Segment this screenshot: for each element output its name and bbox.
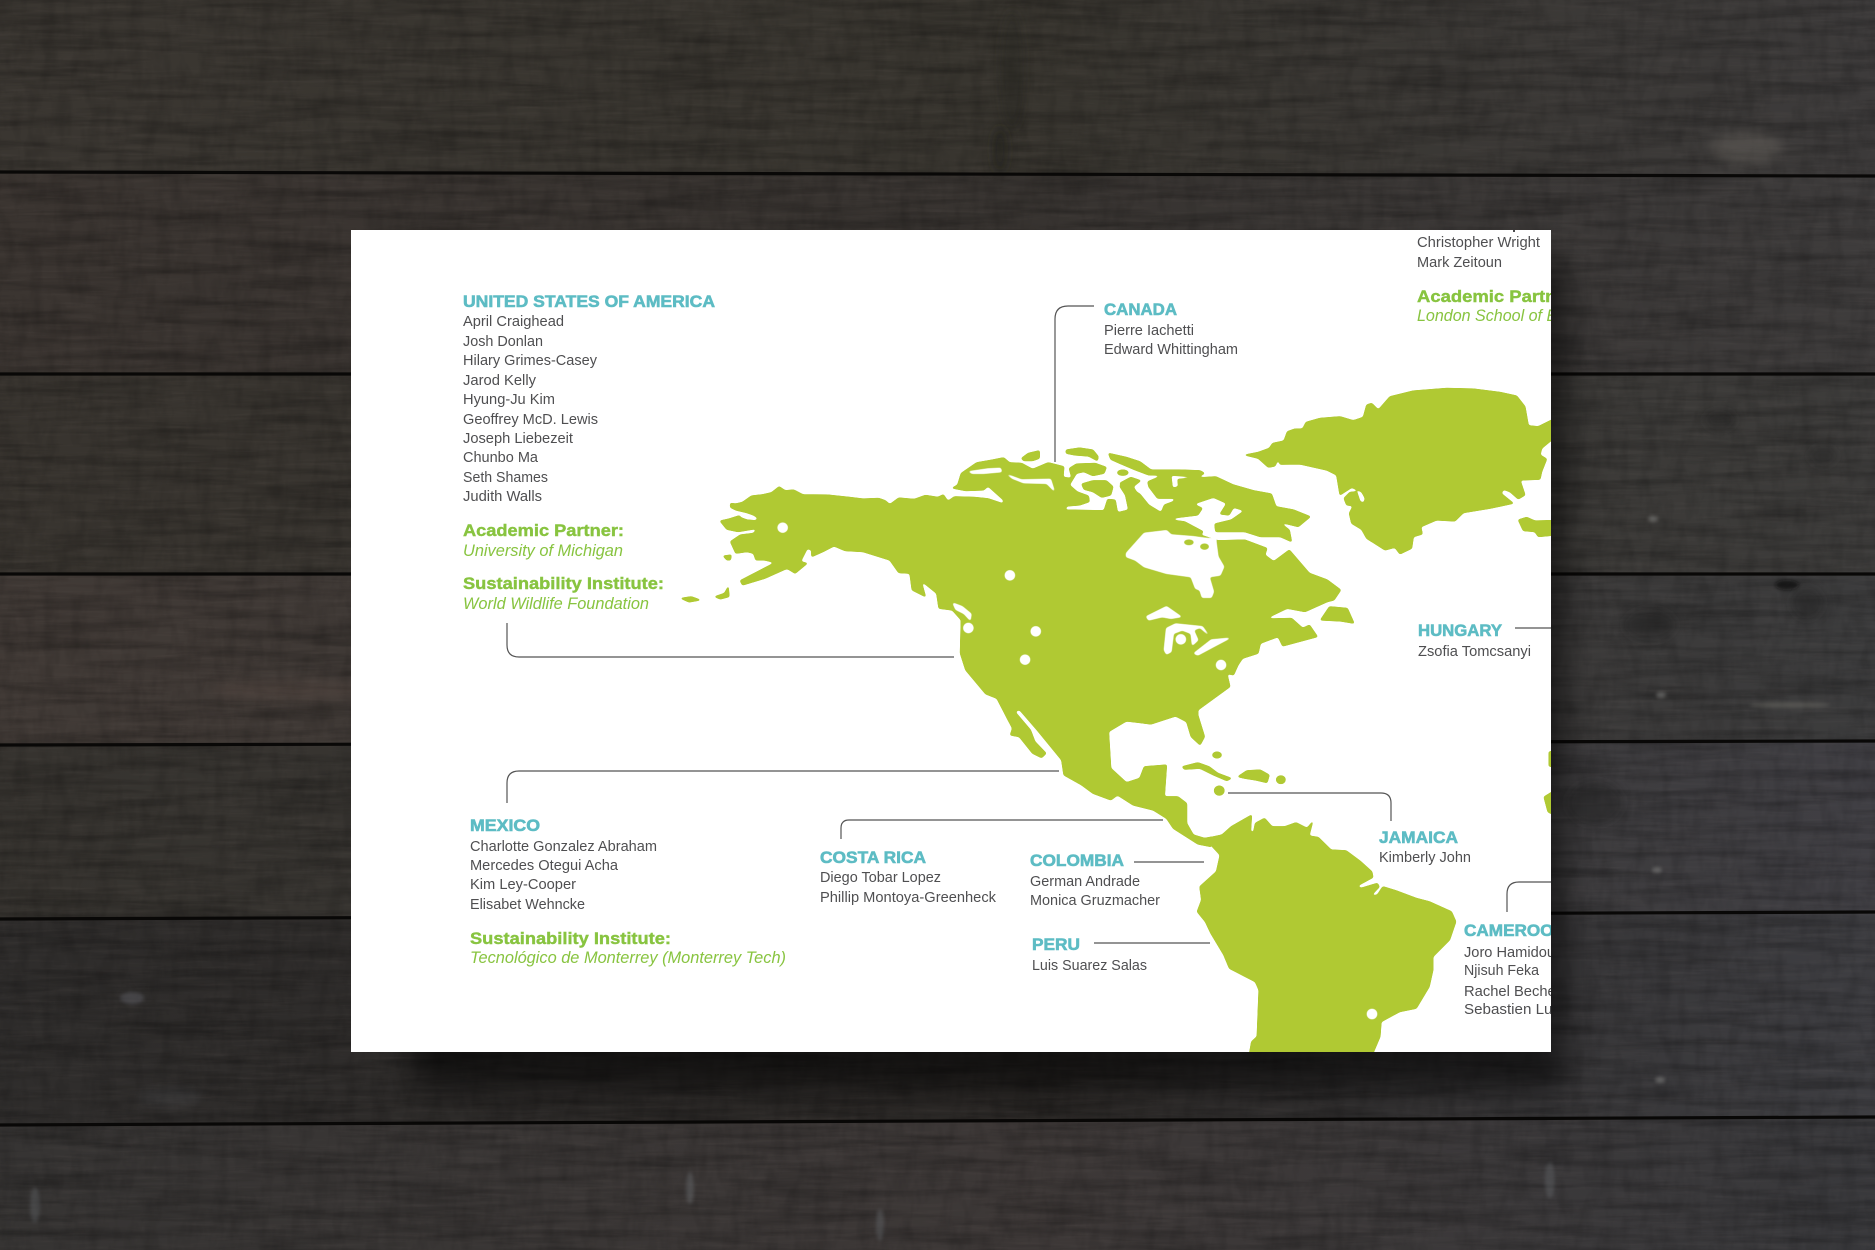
heading: United States of America: UNITED STATES OF AMERICA bbox=[463, 292, 715, 311]
names: Mexico: Kim Ley-Cooper bbox=[470, 877, 576, 893]
names: clipped block bbox=[1417, 235, 1540, 271]
names: Cameroon: Njisuh Feka bbox=[1464, 963, 1540, 979]
sustainability institute: Monterrey Tech: Tecnológico de Monterrey (Monterrey Tech) bbox=[470, 949, 786, 967]
Europe and Africa edge fragments bbox=[1544, 750, 1551, 814]
names: USA: Josh Donlan bbox=[463, 334, 543, 350]
names: clipped block: Mark Zeitoun bbox=[1417, 255, 1502, 271]
panel: Hungary bbox=[1418, 621, 1531, 660]
map of the Americas bbox=[681, 388, 1573, 1073]
heading: Mexico: MEXICO bbox=[470, 816, 540, 835]
names: Colombia: German Andrade bbox=[1030, 874, 1140, 890]
panel: Colombia bbox=[1030, 851, 1160, 909]
South America landmass bbox=[1197, 815, 1456, 1073]
academic partner: London School: London School of Economics bbox=[1417, 307, 1625, 325]
names: Cameroon: Rachel Bechem bbox=[1464, 984, 1568, 1000]
academic partner: London School: Academic Partner: bbox=[1417, 287, 1580, 306]
heading: Canada: CANADA bbox=[1104, 300, 1177, 319]
heading: Hungary: HUNGARY bbox=[1418, 621, 1503, 640]
names: clipped block: Christopher Wright bbox=[1417, 235, 1540, 251]
names: USA: Seth Shames bbox=[463, 470, 548, 486]
sustainability institute: World Wildlife Foundation: Sustainability Institute: bbox=[463, 574, 664, 593]
panel: Peru bbox=[1032, 935, 1147, 974]
names: Costa Rica bbox=[820, 870, 997, 906]
names: Peru: Luis Suarez Salas bbox=[1032, 958, 1147, 974]
sustainability institute: World Wildlife Foundation bbox=[463, 574, 664, 613]
arctic islands bbox=[681, 448, 1205, 602]
panel: Cameroon clipped at the paper edge bbox=[1464, 924, 1551, 1014]
names: USA: April Craighead bbox=[463, 314, 564, 330]
academic partner: University of Michigan bbox=[463, 521, 624, 560]
names: Mexico: Elisabet Wehncke bbox=[470, 897, 585, 913]
inland water bbox=[953, 468, 1354, 655]
Greenland and Iceland bbox=[1245, 388, 1573, 820]
panel: Jamaica bbox=[1379, 828, 1471, 866]
heading: Peru: PERU bbox=[1032, 935, 1080, 954]
names: Mexico: Charlotte Gonzalez Abraham bbox=[470, 839, 657, 855]
location dot Brazil bbox=[1367, 1009, 1377, 1019]
panel: Mexico bbox=[470, 816, 786, 967]
heading: Cameroon: CAMEROON bbox=[1464, 921, 1566, 940]
panel: Costa Rica bbox=[820, 848, 997, 906]
names: Cameroon bbox=[1464, 946, 1551, 1014]
academic partner: University of Michigan: University of Michigan bbox=[463, 542, 623, 560]
names: Canada bbox=[1104, 323, 1238, 358]
academic partner: London School bbox=[1417, 287, 1625, 325]
sustainability institute: Monterrey Tech bbox=[470, 929, 786, 967]
location dots North America bbox=[777, 522, 1226, 670]
names: Colombia: Monica Gruzmacher bbox=[1030, 893, 1160, 909]
white paper sheet bbox=[351, 230, 1551, 1052]
names: USA: Jarod Kelly bbox=[463, 373, 537, 389]
academic partner: University of Michigan: Academic Partner: bbox=[463, 521, 624, 540]
names: Mexico: Mercedes Otegui Acha bbox=[470, 858, 619, 874]
names: Hungary: Zsofia Tomcsanyi bbox=[1418, 644, 1531, 660]
names: USA: Hyung-Ju Kim bbox=[463, 392, 555, 408]
panel: Canada bbox=[1104, 300, 1238, 358]
names: Costa Rica: Diego Tobar Lopez bbox=[820, 870, 941, 886]
sustainability institute: World Wildlife Foundation: World Wildlife Foundation bbox=[463, 595, 649, 613]
names: Cameroon: Joro Hamidou bbox=[1464, 945, 1555, 961]
names: Jamaica: Kimberly John bbox=[1379, 850, 1471, 866]
names: Colombia bbox=[1030, 874, 1160, 909]
names: USA: Joseph Liebezeit bbox=[463, 431, 573, 447]
clipped descender of the previous name bbox=[1513, 230, 1515, 232]
panel: top right clipped United Kingdom block bbox=[1417, 230, 1551, 321]
connector lines bbox=[507, 306, 1552, 943]
names: Canada: Pierre Iachetti bbox=[1104, 323, 1194, 339]
sustainability institute: Monterrey Tech: Sustainability Institute: bbox=[470, 929, 671, 948]
heading: Costa Rica: COSTA RICA bbox=[820, 848, 926, 867]
panel: United States of America bbox=[463, 292, 715, 613]
names: Canada: Edward Whittingham bbox=[1104, 342, 1238, 358]
heading: Jamaica: JAMAICA bbox=[1379, 828, 1458, 847]
names: USA: Geoffrey McD. Lewis bbox=[463, 412, 598, 428]
North America landmass bbox=[681, 448, 1354, 847]
names: USA bbox=[463, 314, 598, 505]
Caribbean islands bbox=[1182, 752, 1285, 795]
names: USA: Hilary Grimes-Casey bbox=[463, 353, 598, 369]
names: Cameroon: Sebastien Luc bbox=[1464, 1002, 1560, 1018]
names: Mexico bbox=[470, 839, 657, 913]
names: Costa Rica: Phillip Montoya-Greenheck bbox=[820, 890, 997, 906]
names: USA: Judith Walls bbox=[463, 489, 542, 505]
names: USA: Chunbo Ma bbox=[463, 450, 539, 466]
heading: Colombia: COLOMBIA bbox=[1030, 851, 1124, 870]
